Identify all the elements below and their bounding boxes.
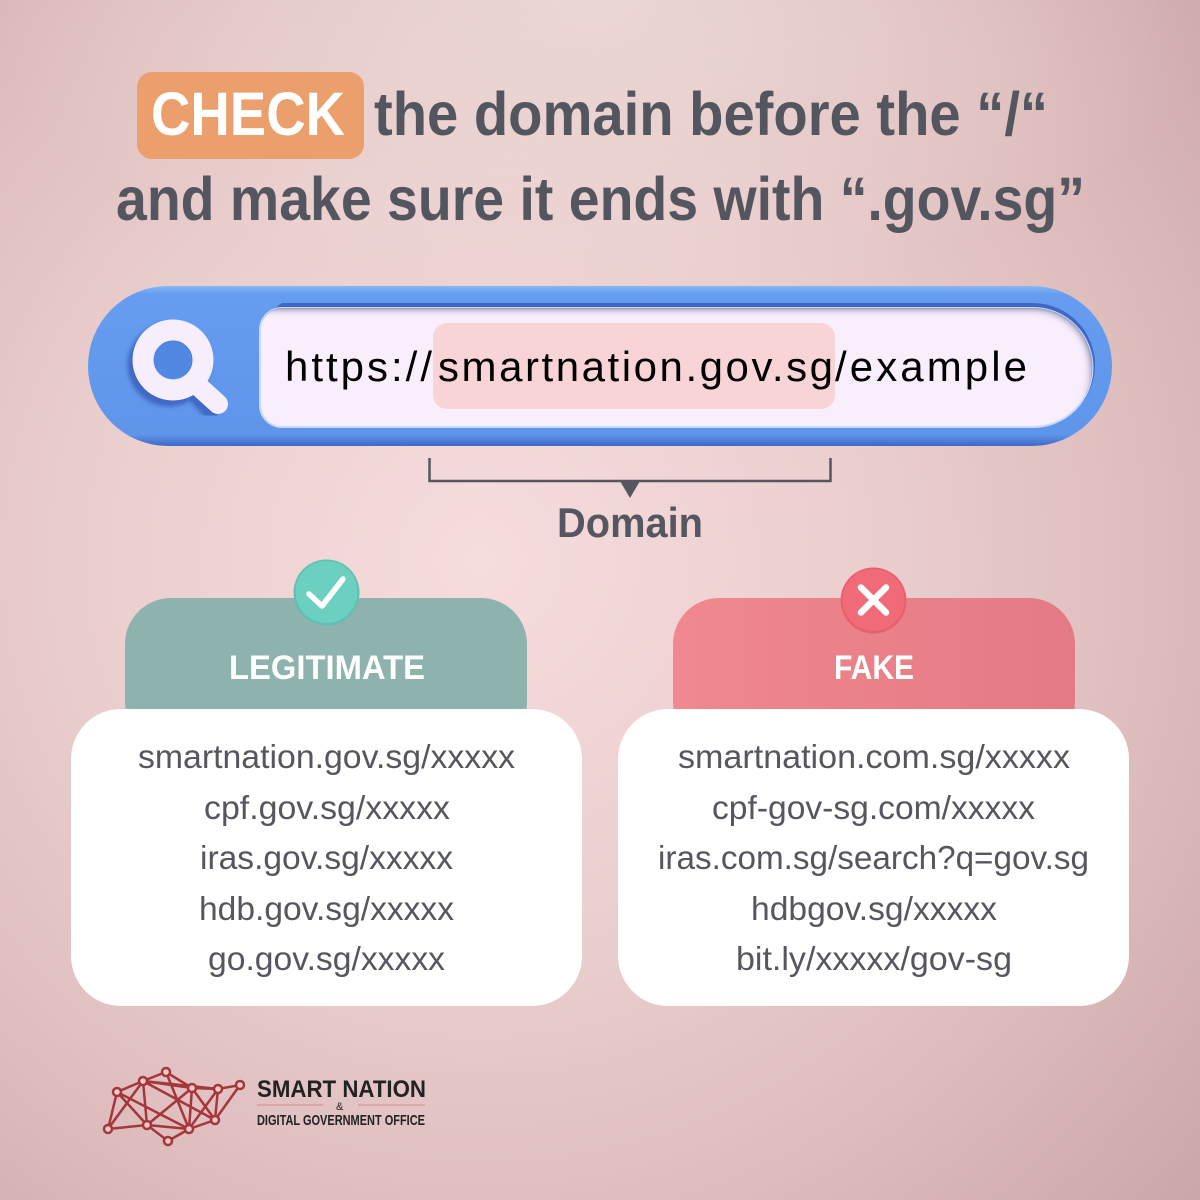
list card: hdbgov.sg/xxxxx bbox=[751, 890, 997, 927]
address field bbox=[240, 303, 1095, 427]
heading: LEGITIMATE bbox=[229, 649, 425, 687]
list card: bit.ly/xxxxx/gov-sg bbox=[736, 940, 1012, 977]
icon: cross bbox=[840, 568, 906, 634]
icon: check bbox=[294, 560, 360, 626]
logo wordmark: SMART NATION bbox=[257, 1076, 426, 1103]
logo wordmark bbox=[257, 1076, 426, 1129]
list card: hdb.gov.sg/xxxxx bbox=[199, 890, 454, 927]
logo wordmark: & bbox=[336, 1101, 344, 1113]
header bbox=[673, 598, 1075, 748]
logo wordmark: DIGITAL GOVERNMENT OFFICE bbox=[257, 1112, 425, 1129]
URL text: https:// bbox=[285, 343, 432, 390]
list card bbox=[618, 709, 1129, 1006]
list card bbox=[71, 709, 582, 1006]
list card: smartnation.com.sg/xxxxx bbox=[678, 738, 1071, 775]
list card: iras.com.sg/search?q=gov.sg bbox=[658, 839, 1089, 876]
domain highlight bbox=[433, 323, 835, 409]
title line 2: and make sure it ends with “.gov.sg” bbox=[116, 165, 1085, 233]
URL text bbox=[285, 343, 1027, 390]
URL text: smartnation.gov.sg bbox=[438, 343, 833, 390]
domain bracket bbox=[430, 458, 830, 498]
list card: smartnation.gov.sg/xxxxx bbox=[138, 738, 516, 775]
icon: magnifying glass bbox=[138, 330, 218, 410]
title line 1: the domain before the “/“ bbox=[374, 80, 1048, 148]
heading: FAKE bbox=[834, 649, 914, 687]
domain label: Domain bbox=[557, 499, 703, 546]
title bbox=[116, 72, 1085, 233]
header bbox=[125, 598, 527, 748]
list card: iras.gov.sg/xxxxx bbox=[200, 839, 454, 876]
arrow bbox=[620, 481, 640, 498]
search bar bbox=[88, 286, 1112, 446]
list card: cpf.gov.sg/xxxxx bbox=[204, 789, 451, 826]
list card: cpf-gov-sg.com/xxxxx bbox=[712, 789, 1035, 826]
panel: legitimate bbox=[71, 560, 582, 1006]
list card: go.gov.sg/xxxxx bbox=[208, 940, 446, 977]
logo bbox=[104, 1068, 426, 1145]
URL text: /example bbox=[835, 343, 1027, 390]
logo network mark bbox=[104, 1068, 244, 1145]
CHECK highlight badge: CHECK bbox=[151, 80, 345, 148]
panel: fake bbox=[618, 568, 1129, 1006]
